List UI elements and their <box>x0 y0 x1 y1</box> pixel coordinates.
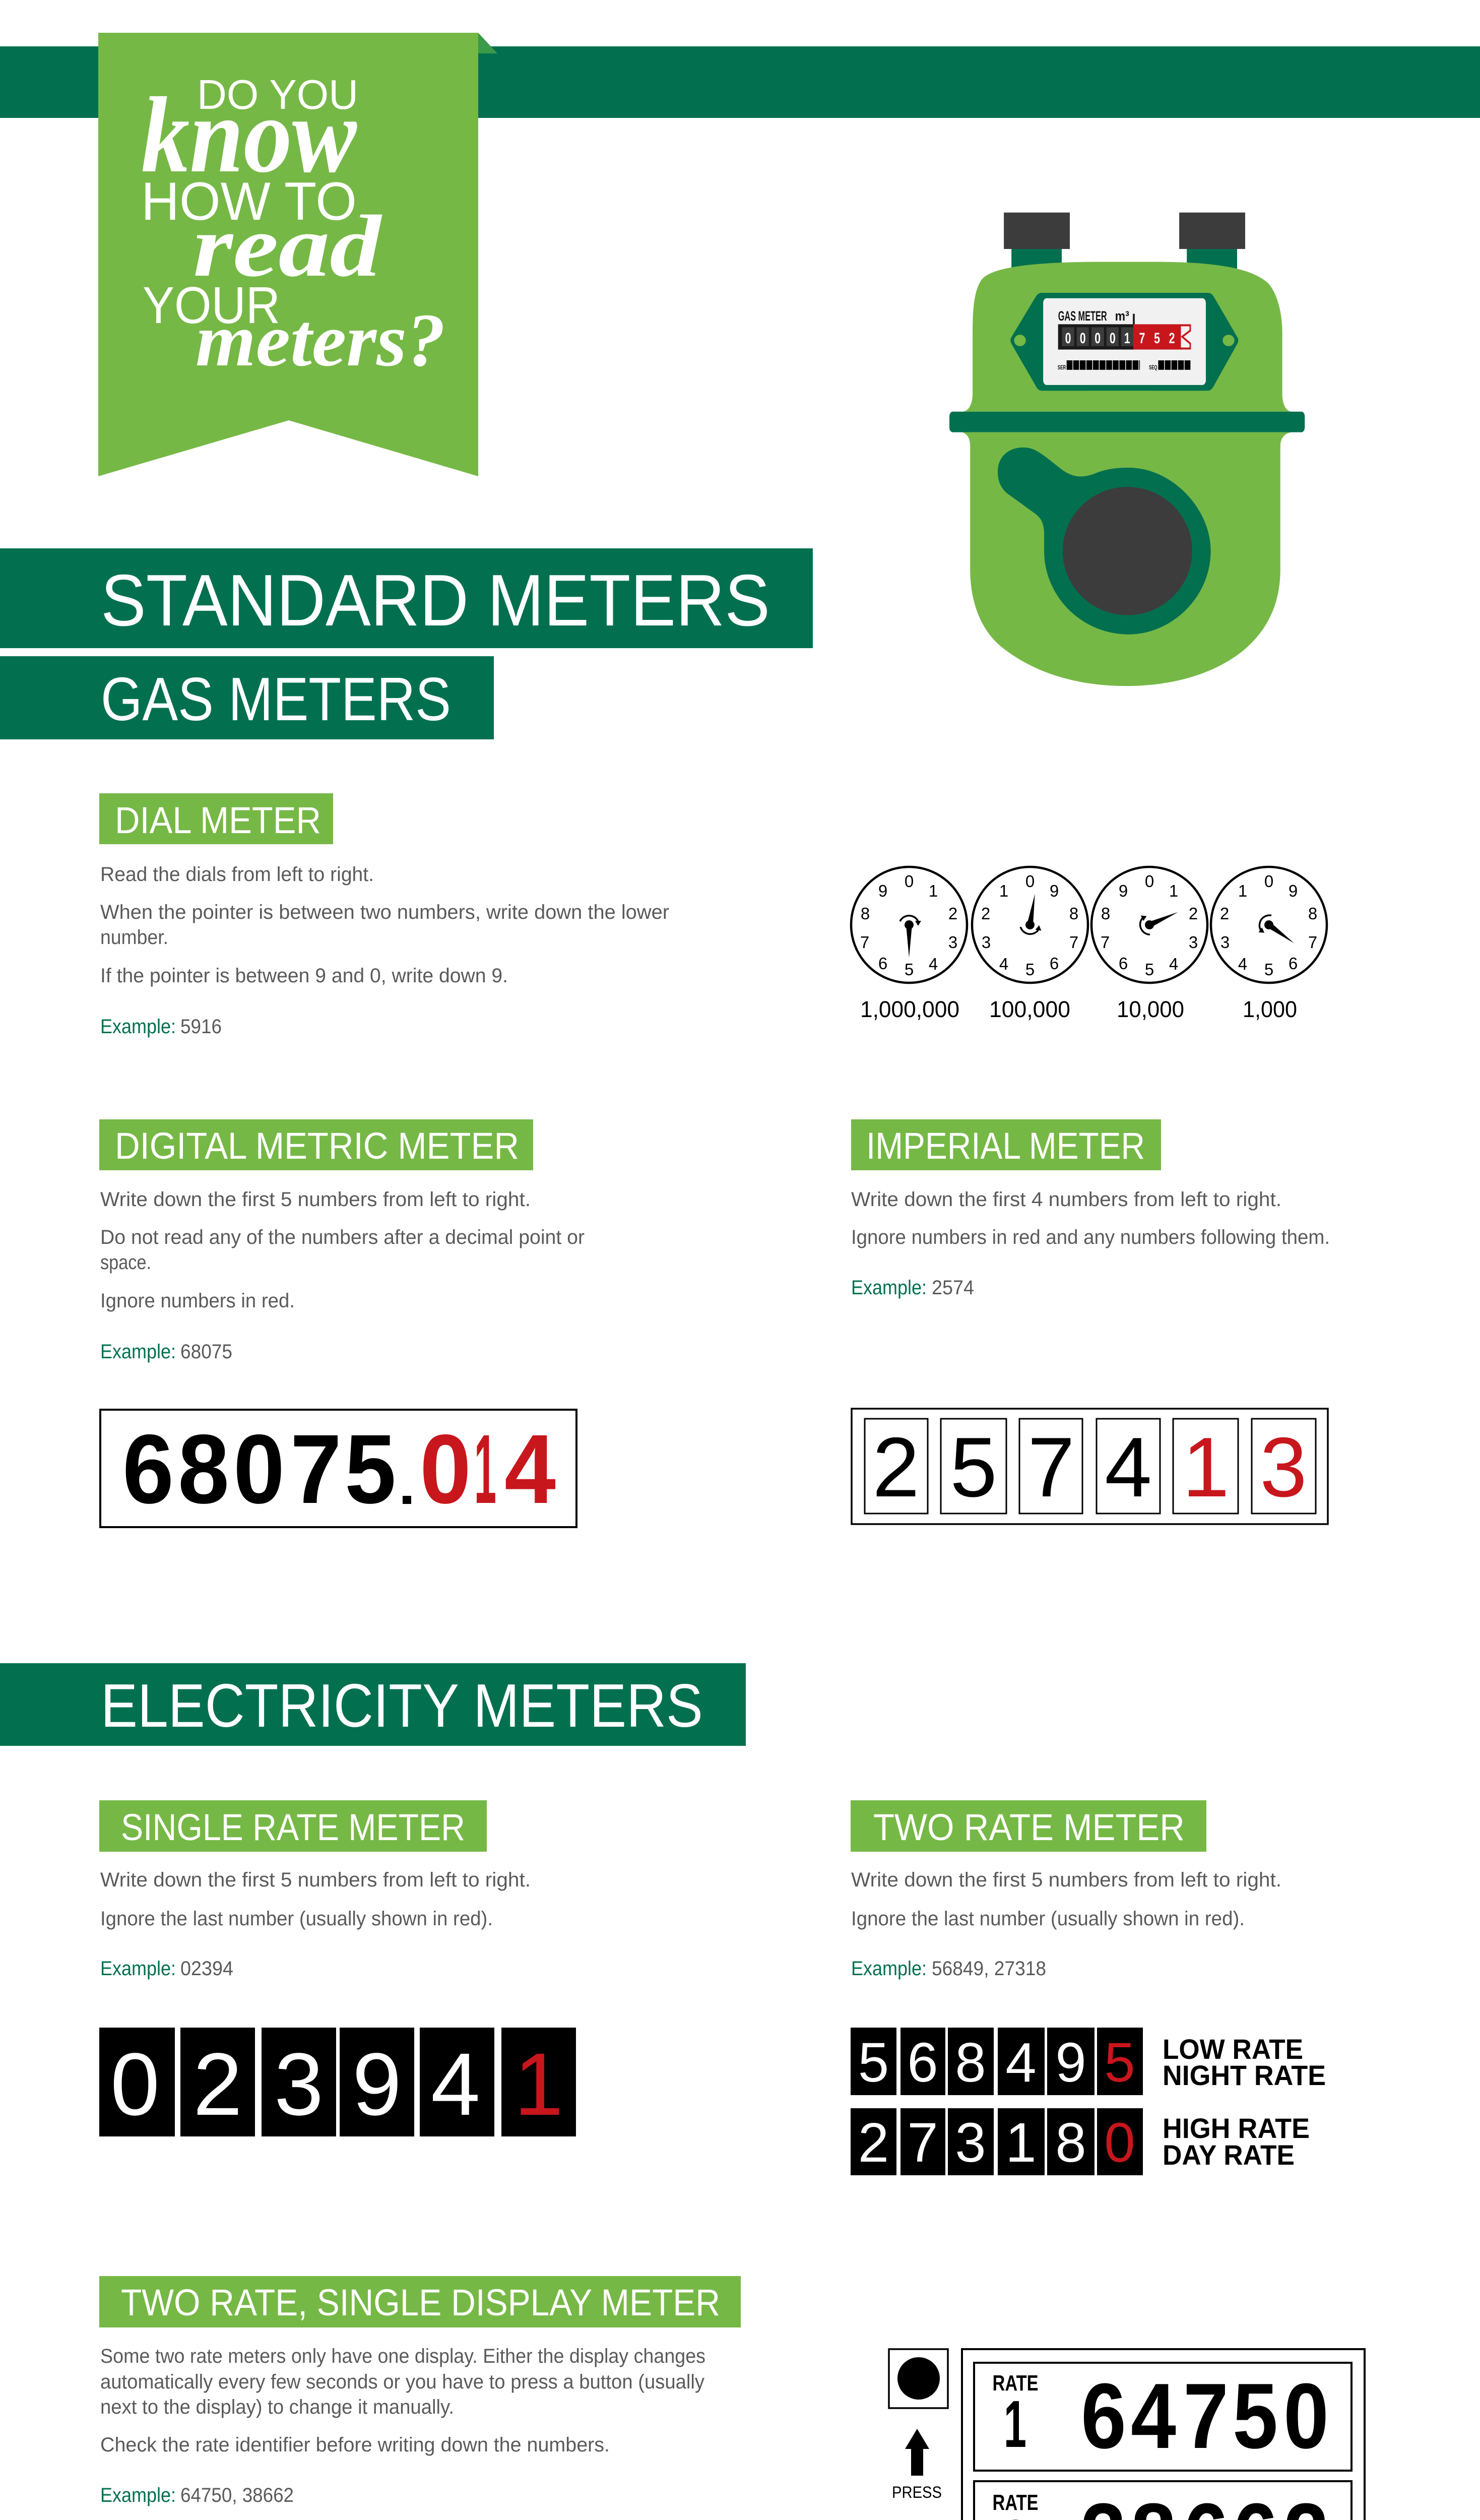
text: digital metric instructions: Ignore numbers in red. <box>100 1290 295 1312</box>
rate labels: HIGH RATE <box>1163 2112 1310 2144</box>
text: dial meter instructions: number. <box>100 926 168 949</box>
panel: two rate, single display meter <box>99 2276 1365 2520</box>
label: single rate meter: SINGLE RATE METER <box>121 1806 465 1848</box>
text: digital metric instructions: Write down the first 5 numbers from left to right. <box>100 1188 531 1211</box>
display: 68075.014: 1 <box>474 1414 496 1524</box>
display: 257413: 13 <box>1182 1420 1307 1515</box>
label: two rate meter: TWO RATE METER <box>873 1806 1185 1848</box>
screen: rate 1: 1 <box>1004 2387 1026 2461</box>
icon: gas meter: GAS METER <box>1058 308 1107 324</box>
arrow: press up <box>905 2429 929 2476</box>
screen: rate 1 <box>974 2363 1352 2471</box>
rate labels <box>1163 2033 1326 2171</box>
text: single display instructions: Some two rate meters only have one display. Either the display changes <box>100 2345 705 2367</box>
display: 68075.014 <box>100 1410 576 1527</box>
icon: press button <box>889 2349 948 2408</box>
label: two rate, single display meter: TWO RATE, SINGLE DISPLAY METER <box>121 2282 720 2323</box>
panel: gas dial meter <box>99 793 1327 1038</box>
dial place-value labels: 10,000 <box>1117 996 1184 1022</box>
text: single rate instructions: Write down the first 5 numbers from left to right. <box>100 1869 531 1891</box>
example: 56849, 27318: Example: <box>851 1958 927 1980</box>
text: dial meter instructions: Read the dials from left to right. <box>100 863 374 886</box>
display: 68075.014: 6 <box>122 1414 174 1524</box>
display: 023941: 02394 <box>110 2035 480 2134</box>
display: 257413 <box>852 1409 1328 1524</box>
dial: 10,000: 0123456789 <box>1101 872 1198 979</box>
example: 2574 <box>851 1277 974 1299</box>
label: dial meter: DIAL METER <box>115 799 321 841</box>
title text: meters? <box>196 298 445 382</box>
title text: know <box>141 75 357 195</box>
text: digital metric instructions: Do not read any of the numbers after a decimal point or <box>100 1226 585 1248</box>
icon: gas meter: SEQ <box>1149 364 1157 371</box>
example: 02394: Example: <box>100 1958 176 1980</box>
title text: read <box>193 197 382 295</box>
example: 02394: 02394 <box>180 1958 233 1980</box>
text: two rate instructions: Write down the first 5 numbers from left to right. <box>851 1869 1281 1891</box>
example: 68075: Example: <box>100 1341 176 1363</box>
title ribbon <box>98 33 497 476</box>
screen: rate 1: 4 <box>1131 2364 1176 2468</box>
example: 2574: Example: <box>851 1277 927 1299</box>
display: 68075.014: 7 <box>290 1414 342 1524</box>
title text: DO YOU <box>197 71 358 118</box>
display: 68075.014: 5 <box>345 1414 396 1524</box>
title text: YOUR <box>143 276 280 334</box>
label: digital metric meter: DIGITAL METRIC METER <box>115 1125 519 1167</box>
display: high rate 273180: 0 <box>1104 2112 1135 2174</box>
dial place-value labels: 1,000 <box>1243 996 1297 1022</box>
heading: standard meters: STANDARD METERS <box>101 559 770 641</box>
text: dial meter instructions <box>100 863 669 987</box>
example: 68075 <box>100 1341 232 1363</box>
text: single display instructions: Check the rate identifier before writing down the numbers. <box>100 2434 610 2456</box>
example: 5916: 5916 <box>180 1016 222 1038</box>
example: 56849, 27318: 56849, 27318 <box>932 1958 1046 1980</box>
display: 68075.014: 8 <box>178 1414 229 1524</box>
text: single rate instructions: Ignore the last number (usually shown in red). <box>100 1908 493 1930</box>
text: two rate instructions <box>851 1869 1281 1930</box>
title text: HOW TO <box>141 171 357 231</box>
screen: rate 1: 7 <box>1183 2364 1229 2468</box>
display: low rate 568495: 56849 <box>858 2032 1086 2094</box>
dial: 1,000,000: 0123456789 <box>860 872 957 979</box>
text: digital metric instructions: space. <box>100 1251 151 1274</box>
screen: rate 1: RATE <box>993 2371 1038 2396</box>
example: 64750, 38662: Example: <box>100 2484 176 2506</box>
example: 68075: 68075 <box>180 1341 232 1363</box>
label: imperial meter: IMPERIAL METER <box>866 1125 1145 1167</box>
dial place-value labels: 100,000 <box>989 996 1070 1022</box>
dial: 1,000: 0123456789 <box>1220 872 1317 979</box>
screen: rate 1: 6 <box>1081 2364 1126 2468</box>
dial: 100,000: 0123456789 <box>981 872 1078 979</box>
example: 02394 <box>100 1958 233 1980</box>
screen: rate 2 <box>974 2481 1352 2520</box>
example: 64750, 38662: 64750, 38662 <box>180 2484 294 2506</box>
top banner bar <box>0 46 1480 118</box>
example: 5916: Example: <box>100 1016 176 1038</box>
text: imperial instructions: Write down the first 4 numbers from left to right. <box>851 1188 1281 1211</box>
panel: imperial meter <box>851 1119 1330 1524</box>
text: single display instructions: next to the display) to change it manually. <box>100 2396 454 2418</box>
display: 68075.014: 0 <box>420 1414 471 1524</box>
rate labels: NIGHT RATE <box>1163 2059 1326 2091</box>
example: 5916 <box>100 1016 222 1038</box>
text: single display instructions <box>100 2345 705 2456</box>
panel: digital metric meter <box>99 1119 585 1527</box>
text: imperial instructions <box>851 1188 1330 1248</box>
panel: two rate meter <box>851 1800 1326 2175</box>
display: low rate 568495: 5 <box>1104 2032 1135 2094</box>
display: rate screens <box>962 2349 1365 2520</box>
display: 023941: 1 <box>514 2035 563 2134</box>
screen: rate 1: 0 <box>1283 2364 1329 2468</box>
chart: four gas dials <box>851 867 1327 1022</box>
icon: gas meter: m³ <box>1115 308 1129 324</box>
text: dial meter instructions: If the pointer is between 9 and 0, write down 9. <box>100 965 508 987</box>
title text <box>141 71 445 382</box>
text: two rate instructions: Ignore the last number (usually shown in red). <box>851 1908 1245 1930</box>
heading: gas meters: GAS METERS <box>101 665 451 733</box>
icon: gas meter: SER <box>1058 364 1066 371</box>
display: 257413: 2574 <box>872 1420 1152 1515</box>
example: 56849, 27318 <box>851 1958 1046 1980</box>
heading: gas meters <box>0 656 494 739</box>
example: 2574: 2574 <box>932 1277 974 1299</box>
rate labels: DAY RATE <box>1163 2139 1295 2171</box>
text: dial meter instructions: When the pointer is between two numbers, write down the lower <box>100 901 669 923</box>
screen: rate 1: 5 <box>1233 2364 1278 2468</box>
display: 68075.014: 4 <box>504 1414 556 1524</box>
text: single display instructions: automatically every few seconds or you have to press a button (usually <box>100 2371 704 2393</box>
icon: gas meter: 00001752 <box>1065 331 1175 347</box>
text: imperial instructions: Ignore numbers in red and any numbers following them. <box>851 1226 1330 1248</box>
display: 68075.014: 0 <box>233 1414 285 1524</box>
panel: single rate meter <box>99 1800 576 2136</box>
label: press: PRESS <box>892 2483 942 2501</box>
icon: gas meter <box>949 213 1305 686</box>
example: 64750, 38662 <box>100 2484 294 2506</box>
screen: rate 2: RATE <box>993 2490 1038 2515</box>
heading: electricity meters <box>0 1663 746 1746</box>
dial place-value labels: 1,000,000 <box>860 996 959 1022</box>
heading: electricity meters: ELECTRICITY METERS <box>101 1671 703 1740</box>
display: high rate 273180: 27318 <box>858 2112 1086 2174</box>
rate labels: LOW RATE <box>1163 2033 1303 2065</box>
text: single rate instructions <box>100 1869 531 1930</box>
dial place-value labels <box>860 996 1297 1022</box>
text: digital metric instructions <box>100 1188 585 1312</box>
